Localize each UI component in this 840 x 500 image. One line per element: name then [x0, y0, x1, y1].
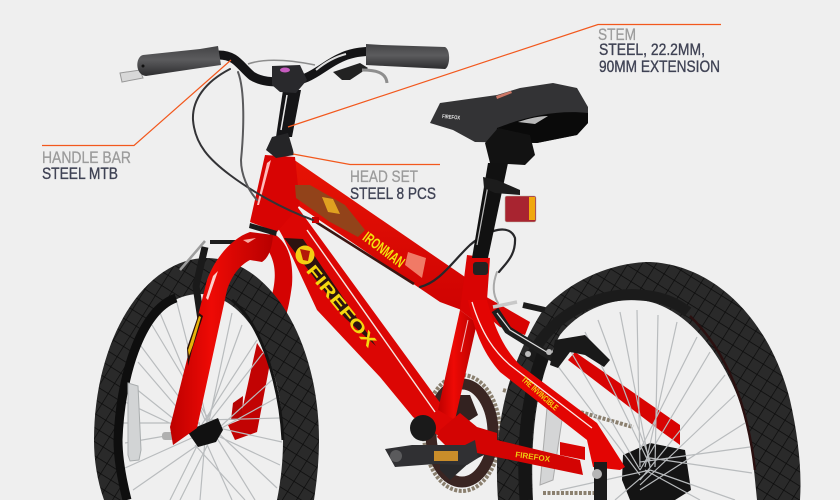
rear cassette — [622, 443, 691, 500]
seat clamp on frame — [473, 262, 488, 275]
top tube — [280, 157, 467, 312]
stem clamp — [272, 65, 307, 93]
decal rays — [405, 252, 426, 278]
front fork far leg lower — [228, 343, 270, 440]
cable clip — [312, 217, 319, 223]
seat stay — [468, 300, 625, 470]
brake cable crossing — [248, 60, 315, 65]
chain stay decal: FIREFOX — [515, 450, 551, 464]
pedal — [385, 440, 478, 467]
headset — [266, 133, 294, 158]
chain stay — [437, 413, 583, 475]
seat tube lug — [460, 255, 490, 323]
fork decal — [187, 313, 203, 366]
saddle — [430, 83, 588, 165]
saddle logo: FIREFOX — [442, 114, 461, 122]
rear brake — [493, 302, 610, 368]
front spokes — [122, 303, 282, 500]
value: handle bar: STEEL MTB — [42, 165, 118, 183]
label: head set: HEAD SET — [350, 168, 418, 186]
rear tyre — [497, 262, 801, 500]
front wheel — [94, 258, 319, 500]
leader line: stem — [288, 24, 721, 127]
front fork near leg — [170, 232, 273, 445]
far seat stay and chain stay — [482, 295, 680, 460]
callout: handle bar — [42, 60, 231, 183]
bottom bracket — [410, 415, 436, 441]
seat stay decal: THE INVINCIBLE — [520, 374, 561, 413]
right grip — [366, 44, 449, 69]
ironman decal text: IRONMAN — [359, 229, 408, 271]
leader line: handle bar — [42, 60, 231, 146]
brake lever — [333, 63, 368, 80]
top tube dark stripe — [316, 222, 414, 284]
fork clamp collar — [249, 223, 277, 236]
front hub — [187, 418, 223, 447]
label: stem: STEM — [598, 26, 636, 44]
rear spokes — [557, 310, 752, 500]
leader line: head set — [293, 154, 440, 164]
handlebar — [120, 44, 449, 93]
saddle clamp — [485, 128, 535, 165]
callout: head set — [293, 154, 440, 203]
left bar end lever — [120, 70, 143, 82]
rear sidewall — [530, 295, 688, 360]
rear axle dropout — [592, 462, 607, 500]
firefox wordmark: FIREFOX — [302, 261, 380, 352]
rear reflector — [505, 196, 536, 222]
stem — [266, 90, 301, 158]
value: stem line 1: STEEL, 22.2MM, — [599, 41, 705, 59]
frame — [250, 155, 625, 475]
seat post — [472, 163, 520, 258]
reflector bracket — [483, 177, 520, 195]
down tube white stripe — [307, 230, 435, 412]
front wheel reflector — [128, 383, 141, 461]
left grip — [137, 46, 221, 76]
callout: stem — [288, 24, 721, 127]
front tyre — [94, 258, 319, 500]
front brake arm — [180, 241, 238, 320]
front fork far leg upper arc — [268, 232, 292, 318]
firefox logo on down tube — [296, 246, 314, 264]
seat tube — [438, 310, 477, 420]
brake and gear cables — [193, 69, 515, 303]
hero graphic decal — [295, 185, 365, 237]
rear wheel reflector — [540, 408, 562, 485]
value: head set: STEEL 8 PCS — [350, 185, 436, 203]
head tube — [250, 155, 300, 232]
label: handle bar: HANDLE BAR — [42, 149, 131, 167]
chain and chainring — [424, 375, 633, 493]
rear wheel — [497, 262, 801, 500]
dark wedge under logo — [284, 238, 376, 346]
value: stem line 2: 90MM EXTENSION — [599, 58, 720, 76]
down tube — [278, 205, 455, 437]
